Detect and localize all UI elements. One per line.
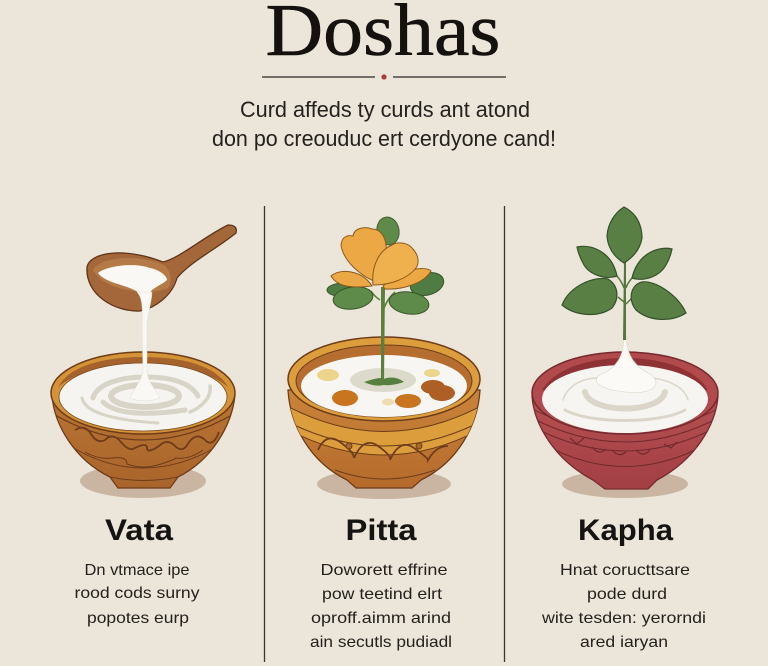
subtitle: don po creouduc ert cerdyone cand! [212,126,556,151]
text: Kapha description: wite tesden: yerorndi [541,610,706,627]
text: Pitta description: Doworett effrine [320,562,448,579]
text: Kapha description: ared iaryan [580,634,668,651]
text: Kapha description: Hnat coructtsare [560,562,690,579]
text: Pitta description: ain secutls pudiadl [310,634,452,651]
panel: Kapha [530,207,720,651]
panel: Pitta [285,215,483,651]
icon: Pitta bowl with flower [285,215,483,499]
text: Pitta description [310,562,452,651]
heading: Pitta: Pitta [346,514,417,547]
text: Pitta description: pow teetind elrt [322,586,443,603]
title divider with dot [262,74,506,80]
text: Vata description: rood cods surny [74,585,200,602]
column divider right [504,206,506,662]
panel: Vata [50,225,237,627]
subtitle [212,97,556,151]
text: Vata description: Dn vtmace ipe [84,562,190,579]
text: Pitta description: oproff.aimm arind [311,610,451,627]
text: Vata description: popotes eurp [87,610,189,627]
icon: Vata bowl with spoon [50,225,237,498]
icon: Kapha bowl with plant [530,207,720,498]
heading: Kapha: Kapha [578,514,673,547]
heading: Vata: Vata [105,514,173,547]
text: Vata description [74,562,200,627]
text: Kapha description: pode durd [587,586,667,603]
column divider left [264,206,266,662]
text: Kapha description [541,562,706,651]
subtitle: Curd affeds ty curds ant atond [240,97,530,122]
